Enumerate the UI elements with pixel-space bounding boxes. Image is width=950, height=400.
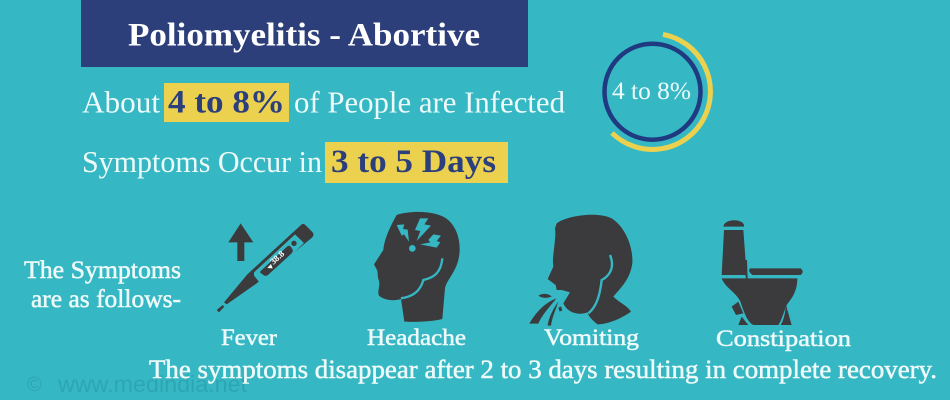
label: Fever: Fever	[221, 325, 277, 350]
label: Vomiting: Vomiting	[544, 325, 640, 350]
ring: 4 to 8%	[604, 34, 710, 149]
icon: headache	[374, 212, 460, 322]
onset line: Symptoms Occur in	[82, 144, 322, 179]
ring: 4 to 8%: 4 to 8%	[612, 78, 691, 105]
intro label	[24, 257, 181, 313]
onset line	[82, 142, 508, 183]
icon: fever thermometer: 38.8	[268, 248, 287, 266]
icon: vomiting	[529, 215, 632, 326]
title banner	[81, 0, 528, 67]
label: Headache: Headache	[367, 325, 466, 350]
intro label: The Symptoms	[24, 257, 181, 284]
label: Constipation: Constipation	[716, 326, 852, 351]
infection rate line: 4 to 8%	[168, 84, 285, 120]
intro label: are as follows-	[31, 286, 181, 313]
onset line: 3 to 5 Days	[331, 144, 496, 180]
infection rate line	[82, 83, 565, 122]
watermark: ©	[27, 374, 42, 396]
recovery statement: The symptoms disappear after 2 to 3 days resulting in complete recovery.	[149, 355, 937, 384]
watermark: www.medindia.net	[57, 371, 248, 397]
icon: constipation toilet	[722, 220, 803, 325]
infection rate line: of People are Infected	[294, 84, 565, 120]
title banner: Poliomyelitis - Abortive	[128, 18, 480, 54]
infection rate line: About	[82, 84, 160, 120]
icon: fever thermometer	[217, 223, 314, 312]
